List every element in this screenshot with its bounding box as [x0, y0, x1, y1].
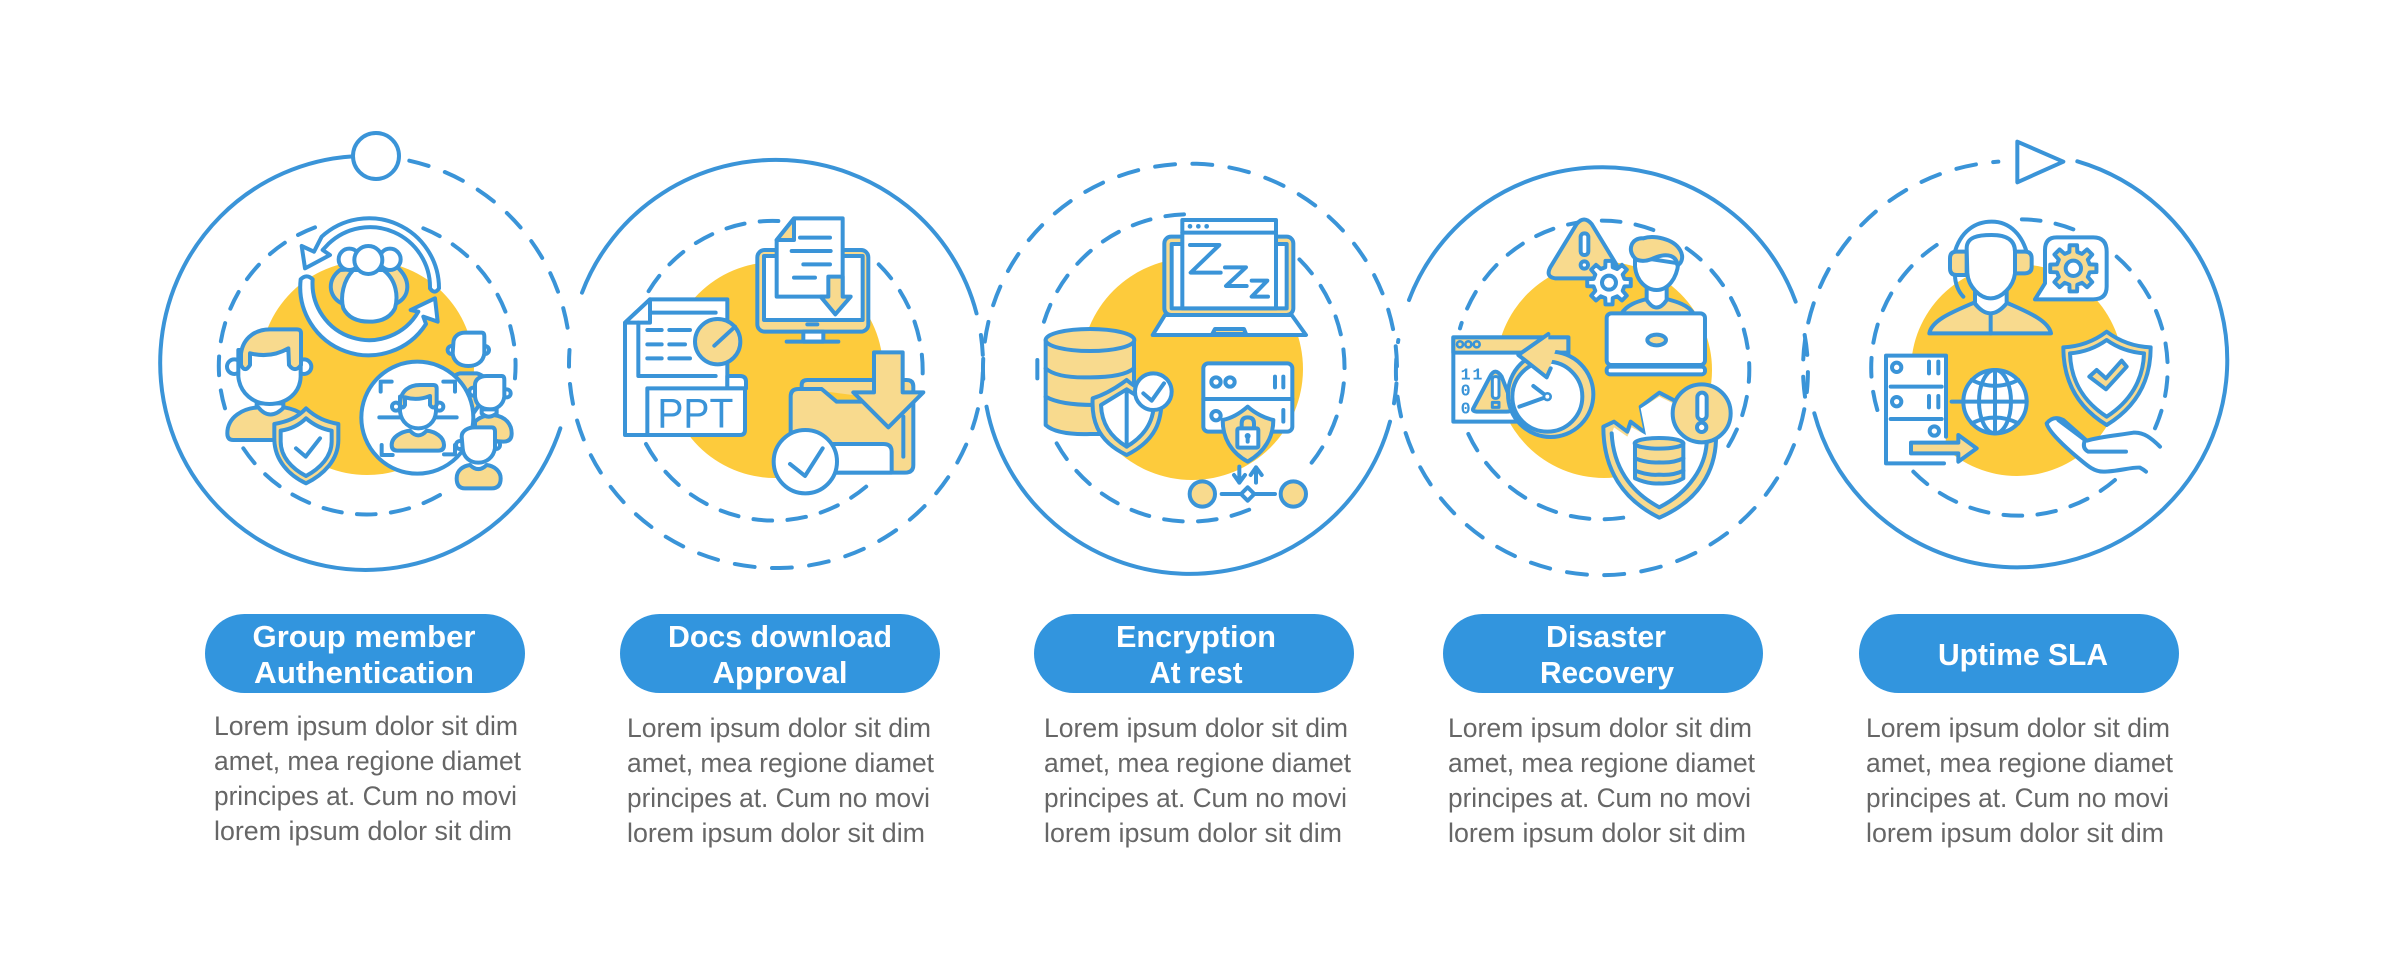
text block 1: principes at. Cum no movi [214, 781, 517, 811]
yellow circle 3 [1081, 258, 1303, 480]
pill heading 2: Docs download [668, 619, 892, 654]
text block 1: Lorem ipsum dolor sit dim [214, 711, 518, 741]
icon: code window and restore clock [1453, 334, 1593, 437]
text block 5: amet, mea regione diamet [1866, 748, 2173, 778]
text block 2: principes at. Cum no movi [627, 783, 930, 813]
text block 2: Lorem ipsum dolor sit dim [627, 713, 931, 743]
text block 1 [214, 711, 521, 846]
text block 1: lorem ipsum dolor sit dim [214, 816, 512, 846]
pill heading 5: Uptime SLA [1938, 637, 2108, 672]
illustration 1 [160, 133, 568, 570]
icon: laptop with sleeping window [1153, 220, 1306, 335]
text block 3: principes at. Cum no movi [1044, 783, 1347, 813]
outer ring solid 5 [1814, 161, 2227, 567]
binary digits: 11 [1461, 366, 1482, 385]
yellow circle 1 [260, 261, 474, 475]
yellow circle 2 [667, 262, 883, 478]
marker triangle [2017, 142, 2063, 182]
illustration 4 [1396, 167, 1808, 575]
illustration 3 [983, 164, 1397, 574]
pill heading 3: At rest [1150, 655, 1242, 690]
illustration 2 [569, 160, 983, 568]
yellow circle 4 [1496, 262, 1712, 478]
text block 1: amet, mea regione diamet [214, 746, 521, 776]
illustration 5 [1803, 142, 2227, 567]
inner dashed ring 1 [219, 227, 516, 514]
text block 4: principes at. Cum no movi [1448, 783, 1751, 813]
panel: disaster recovery [1396, 167, 1808, 848]
icon: support agent [1929, 222, 2051, 333]
text block 5 [1866, 713, 2173, 848]
inner dashed ring 4 [1460, 221, 1749, 519]
binary digits [1461, 366, 1482, 419]
yellow circle 5 [1911, 264, 2123, 476]
PPT label: PPT [657, 390, 733, 436]
pill heading 4 [1443, 614, 1763, 693]
inner dashed ring 2 [646, 221, 923, 521]
icon: database with shield [1046, 329, 1172, 455]
icon: warning triangle and gear [1549, 219, 1631, 304]
pill heading 3: Encryption [1116, 619, 1276, 654]
icon: monitor with document [757, 218, 868, 342]
icon: speech bubble gear [2035, 237, 2107, 299]
outer ring solid 3 [987, 407, 1390, 574]
icon: shield on open hand [2047, 332, 2160, 472]
pill heading 2 [620, 614, 940, 693]
outer ring solid 2 [582, 160, 977, 313]
icon: server rack with globe [1886, 356, 2027, 463]
text block 4: lorem ipsum dolor sit dim [1448, 818, 1746, 848]
pill heading 1: Authentication [254, 655, 474, 690]
pill heading 2: Approval [712, 655, 848, 690]
text block 2: lorem ipsum dolor sit dim [627, 818, 925, 848]
panel: group member authentication [160, 133, 568, 846]
marker circle [353, 133, 399, 179]
outer ring solid 1 [160, 156, 560, 570]
outer ring dashed 5 [1803, 162, 1998, 397]
inner dashed ring 3 [1037, 214, 1345, 522]
text block 2 [627, 713, 934, 848]
icon: person at laptop [1607, 237, 1705, 374]
text block 3: lorem ipsum dolor sit dim [1044, 818, 1342, 848]
icon: transfer arrows and network nodes [1190, 467, 1306, 507]
pill heading 5 [1859, 614, 2179, 693]
text block 5: Lorem ipsum dolor sit dim [1866, 713, 2170, 743]
icon: crowd and face scan [361, 333, 512, 488]
text block 4: amet, mea regione diamet [1448, 748, 1755, 778]
pill heading 1: Group member [252, 619, 476, 654]
outer ring dashed 1 [409, 161, 568, 328]
pill heading 1 [205, 614, 525, 693]
text block 3: amet, mea regione diamet [1044, 748, 1351, 778]
icon: rotating group arrows [300, 218, 439, 355]
text block 4: Lorem ipsum dolor sit dim [1448, 713, 1752, 743]
outer ring solid 4 [1409, 167, 1796, 302]
text block 5: lorem ipsum dolor sit dim [1866, 818, 2164, 848]
outer ring dashed 4 [1396, 335, 1808, 575]
text block 3: Lorem ipsum dolor sit dim [1044, 713, 1348, 743]
text block 5: principes at. Cum no movi [1866, 783, 2169, 813]
icon: person with shield [227, 329, 338, 483]
inner dashed ring 5 [1871, 219, 2168, 516]
icon: broken shield with database [1603, 384, 1731, 518]
icon: server with lock shield [1203, 363, 1292, 462]
text block 2: amet, mea regione diamet [627, 748, 934, 778]
icon: PPT file [625, 299, 746, 436]
pill heading 3 [1034, 614, 1354, 693]
pill heading 4: Recovery [1540, 655, 1675, 690]
icon: folder with download arrow and check [774, 352, 923, 493]
panel: docs download approval [569, 160, 983, 848]
outer ring dashed 2 [569, 335, 983, 568]
panel: uptime SLA [1803, 142, 2227, 848]
binary digits: 0 [1461, 383, 1471, 402]
outer ring dashed 3 [983, 164, 1397, 403]
pill heading 4: Disaster [1546, 619, 1666, 654]
panel: encryption at rest [983, 164, 1397, 848]
binary digits: 0 [1461, 400, 1471, 419]
text block 4 [1448, 713, 1755, 848]
text block 3 [1044, 713, 1351, 848]
